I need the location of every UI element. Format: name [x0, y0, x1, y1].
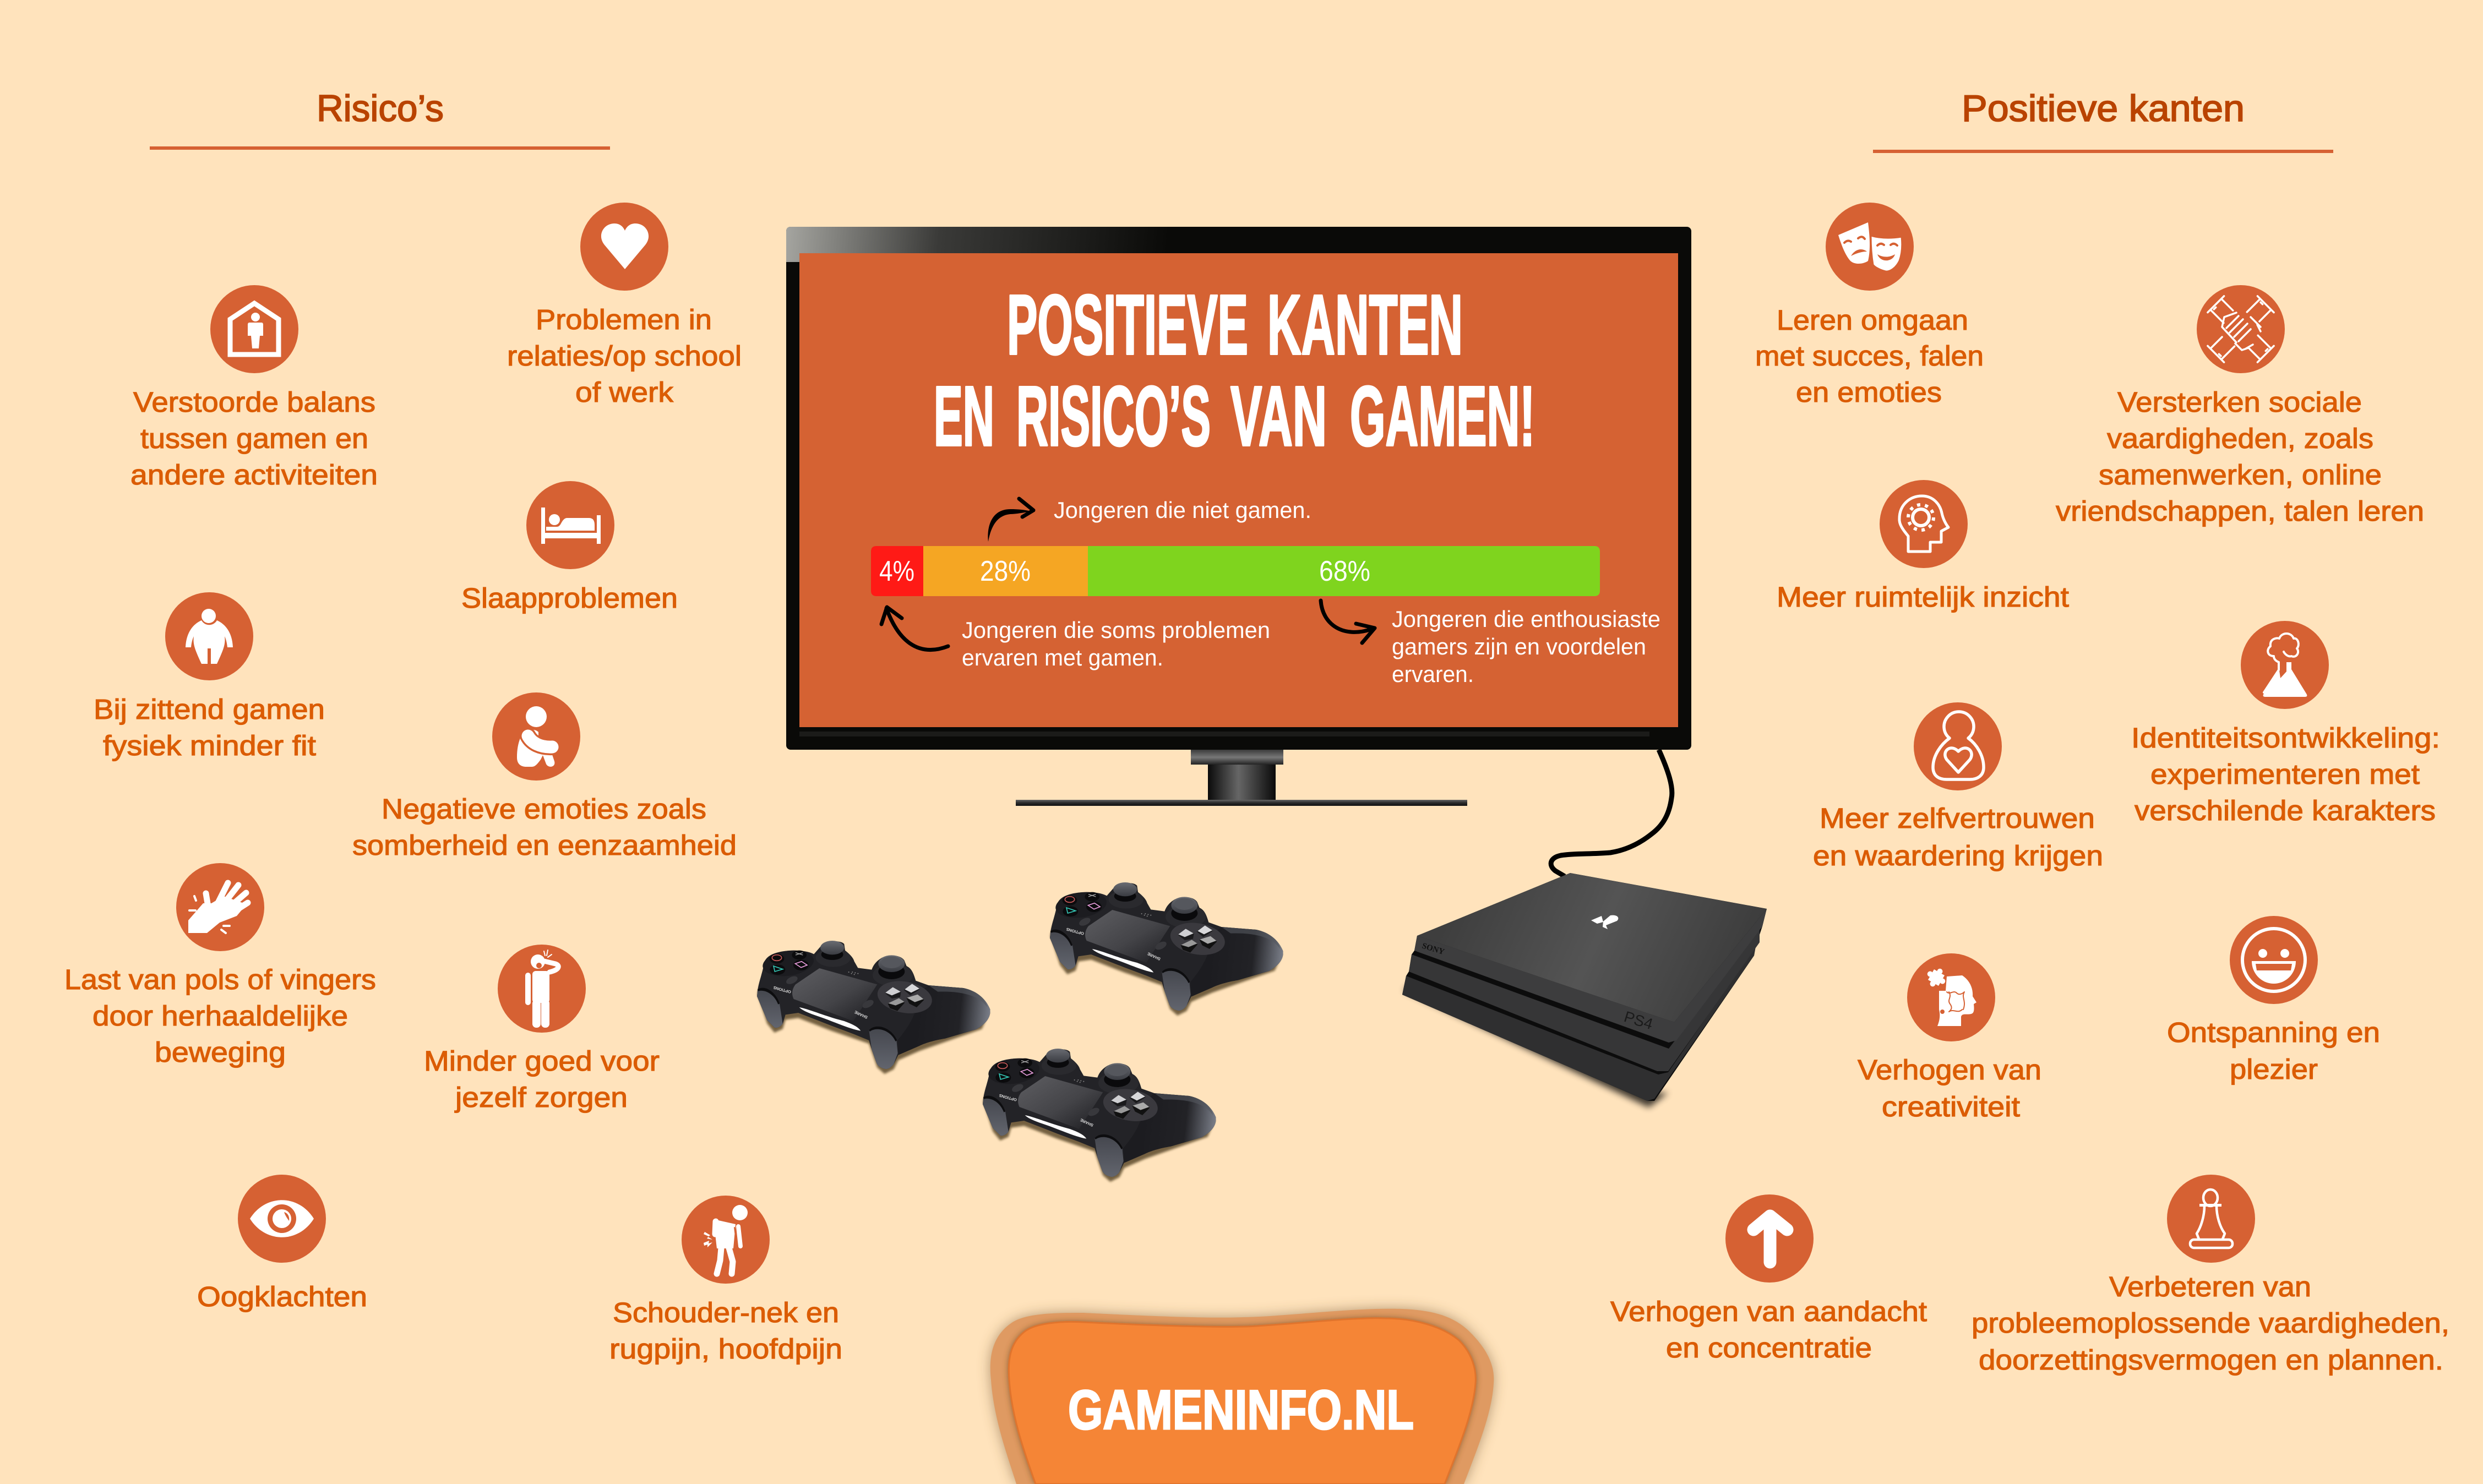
- text: schouder-nek: rugpijn, hoofdpijn: [609, 1333, 842, 1365]
- title: RISICO’S: [1016, 369, 1211, 463]
- badge inner shadow: [1009, 1318, 1475, 1484]
- sony label: SONY: [1421, 942, 1446, 957]
- text: zelfvertrouwen: [1813, 803, 2103, 871]
- icon: smiling face: [2230, 916, 2318, 1004]
- panel: positieve kanten heading: [1873, 88, 2333, 153]
- heading underline: [1873, 150, 2333, 153]
- heading: positieve kanten: Positieve kanten: [1962, 88, 2245, 129]
- risk: negatieve emoties: [352, 692, 737, 861]
- cable: [1551, 750, 1672, 876]
- title: EN: [934, 369, 994, 463]
- text: verbeteren: probleemoplossende vaardigheden,: [1972, 1307, 2449, 1339]
- icon: person holding head: [498, 945, 586, 1033]
- tv bezel: [786, 227, 1691, 750]
- console shadow: [1404, 985, 1668, 1107]
- text: verstoorde balans: [130, 386, 378, 490]
- icon: up arrow: [1725, 1194, 1814, 1283]
- badge shadow: [990, 1309, 1494, 1484]
- top slab side: [1414, 909, 1767, 1043]
- text: enthousiaste gamers: [1392, 606, 1660, 687]
- text: problemen in relaties: of werk: [575, 377, 674, 408]
- bar segment: 68%: [1085, 546, 1600, 596]
- icon: sitting person: [492, 692, 580, 781]
- text: ontspanning: Ontspanning en: [2167, 1017, 2380, 1048]
- text: enthousiaste gamers: gamers zijn en voordelen: [1392, 634, 1646, 659]
- icon: person with back pain: [682, 1196, 770, 1284]
- icon: heart: [580, 203, 668, 291]
- text: enthousiaste gamers: ervaren.: [1392, 661, 1474, 687]
- text: zelfvertrouwen: en waardering krijgen: [1813, 840, 2103, 871]
- text: ruimtelijk inzicht: Meer ruimtelijk inzicht: [1777, 581, 2069, 613]
- tv set: [786, 227, 1691, 806]
- text: last van pols: beweging: [155, 1036, 286, 1068]
- text: leren omgaan: met succes, falen: [1755, 340, 1984, 372]
- text: zittend gamen: fysiek minder fit: [103, 730, 316, 761]
- title: [934, 277, 1535, 463]
- risk: slaap: [461, 481, 678, 614]
- controller 2: SHARE: [1146, 951, 1161, 962]
- text: aandacht: [1610, 1296, 1927, 1363]
- text: identiteitsontwikkeling: [2131, 722, 2440, 826]
- logo badge: [990, 1309, 1494, 1484]
- text: verhogen creativiteit: creativiteit: [1882, 1091, 2020, 1122]
- text: minder goed voor: Minder goed voor: [424, 1045, 660, 1077]
- icon: overweight person: [165, 592, 253, 680]
- controller 1: OPTIONS: [773, 985, 792, 995]
- text: identiteitsontwikkeling: experimenteren met: [2150, 759, 2420, 790]
- icon: hurting hand: [176, 863, 264, 951]
- risk: oogklachten: [197, 1175, 367, 1312]
- text: verstoorde balans: Verstoorde balans: [133, 386, 375, 418]
- title: VAN: [1230, 369, 1327, 463]
- text: verstoorde balans: tussen gamen en: [140, 423, 368, 454]
- text: aandacht: en concentratie: [1666, 1332, 1872, 1363]
- risk: balans: [130, 285, 378, 490]
- top surface: [1417, 873, 1767, 1022]
- text: slaapproblemen: Slaapproblemen: [461, 582, 678, 614]
- value labels: 28%: [980, 555, 1031, 587]
- value labels: [879, 555, 1370, 587]
- text: oogklachten: Oogklachten: [197, 1281, 367, 1312]
- title: GAMEN!: [1350, 369, 1535, 463]
- text: last van pols: door herhaaldelijke: [92, 1000, 348, 1032]
- text: problemen in relaties: Problemen in: [536, 304, 712, 335]
- positive: sociale vaardigheden: [2056, 285, 2424, 527]
- text: verbeteren: Verbeteren van: [2109, 1271, 2311, 1302]
- middle slab: [1409, 929, 1760, 1071]
- text: versterken sociale: [2056, 386, 2424, 527]
- text: last van pols: [64, 964, 376, 1068]
- text: versterken sociale: vaardigheden, zoals: [2107, 423, 2373, 454]
- bar segment: 28%: [919, 546, 1088, 596]
- text: identiteitsontwikkeling: Identiteitsontwikkeling:: [2131, 722, 2440, 754]
- text: zittend gamen: Bij zittend gamen: [94, 694, 325, 725]
- icon: joined hands: [2197, 285, 2285, 373]
- text: last van pols: Last van pols of vingers: [64, 964, 376, 995]
- controller 2: [1050, 882, 1283, 1016]
- console body: [1402, 873, 1767, 1101]
- badge text: GAMENINFO.NL: [1068, 1379, 1414, 1441]
- icon: puzzle head: [1907, 953, 1995, 1041]
- text: minder goed voor: [424, 1045, 660, 1113]
- title: POSITIEVE: [1007, 277, 1248, 372]
- icon: erupting flask: [2241, 621, 2329, 709]
- risk: fysiek: [94, 592, 325, 761]
- positive: creativiteit: [1858, 953, 2041, 1122]
- risk: relaties: [507, 203, 742, 408]
- stacked bar chart: [871, 546, 1600, 596]
- controller 1: [757, 941, 990, 1074]
- positive: identiteit: [2131, 621, 2440, 826]
- bar segment: 4%: [871, 546, 923, 596]
- text: soms problemen: ervaren met gamen.: [962, 645, 1163, 670]
- text: versterken sociale: vriendschappen, talen leren: [2056, 495, 2424, 527]
- tv stand: [1016, 749, 1467, 806]
- text: verbeteren: [1972, 1271, 2449, 1376]
- risk: rugpijn: [609, 1196, 842, 1365]
- value labels: 68%: [1319, 555, 1370, 587]
- controller 3: [983, 1049, 1216, 1182]
- text: verhogen creativiteit: Verhogen van: [1858, 1054, 2041, 1085]
- text: verstoorde balans: andere activiteiten: [130, 459, 378, 490]
- positive: emoties: [1755, 203, 1984, 408]
- controller 2: OPTIONS: [1066, 926, 1085, 936]
- game console: [1402, 873, 1767, 1107]
- risk: pols: [64, 863, 376, 1068]
- title: KANTEN: [1267, 277, 1463, 372]
- text: niet gamen: Jongeren die niet gamen.: [1054, 497, 1311, 523]
- text: ontspanning: [2167, 1017, 2380, 1085]
- text: verhogen creativiteit: [1858, 1054, 2041, 1122]
- text: negatieve emoties: Negatieve emoties zoals: [382, 793, 706, 825]
- text: identiteitsontwikkeling: verschilende karakters: [2134, 795, 2436, 826]
- heading underline: [150, 146, 610, 150]
- text: schouder-nek: Schouder-nek en: [613, 1297, 839, 1328]
- risk: zelfzorg: [424, 945, 660, 1113]
- text: soms problemen: [962, 617, 1270, 670]
- text: leren omgaan: en emoties: [1796, 377, 1942, 408]
- text: problemen in relaties: relaties/op school: [507, 340, 742, 372]
- text: enthousiaste gamers: Jongeren die enthousiaste: [1392, 606, 1660, 632]
- panel: risico's heading: [150, 88, 610, 150]
- positive: ruimtelijk inzicht: [1777, 480, 2069, 613]
- text: versterken sociale: samenwerken, online: [2099, 459, 2382, 490]
- icon: theatre masks: [1826, 203, 1914, 291]
- badge outer: [990, 1309, 1494, 1484]
- controller 3: OPTIONS: [999, 1093, 1017, 1103]
- arrow: soms problemen: [881, 607, 948, 650]
- heading: risico's: Risico’s: [317, 88, 444, 129]
- playstation logo: [1591, 915, 1618, 929]
- text: zittend gamen: [94, 694, 325, 761]
- badge face: [1009, 1318, 1475, 1484]
- icon: eye: [238, 1175, 326, 1263]
- arrow: enthousiaste gamers: [1321, 601, 1375, 643]
- text: schouder-nek: [609, 1297, 842, 1365]
- ps4 label: PS4: [1622, 1008, 1655, 1033]
- text: soms problemen: Jongeren die soms problemen: [962, 617, 1270, 643]
- text: ontspanning: plezier: [2230, 1054, 2318, 1085]
- positive: ontspanning: [2167, 916, 2380, 1085]
- positive: probleemoplossend: [1972, 1175, 2449, 1376]
- value labels: 4%: [879, 555, 914, 587]
- icon: chess pawn: [2167, 1175, 2255, 1263]
- text: versterken sociale: Versterken sociale: [2117, 386, 2362, 418]
- tv sheen: [786, 227, 1168, 262]
- controller 1: SHARE: [853, 1010, 868, 1020]
- icon: bed: [526, 481, 614, 569]
- tv screen: [799, 253, 1678, 727]
- icon: head with gear: [1880, 480, 1968, 568]
- text: negatieve emoties: somberheid en eenzaamheid: [352, 830, 737, 861]
- text: minder goed voor: jezelf zorgen: [454, 1082, 628, 1113]
- text: aandacht: Verhogen van aandacht: [1610, 1296, 1927, 1327]
- text: leren omgaan: Leren omgaan: [1777, 304, 1968, 336]
- text: leren omgaan: [1755, 304, 1984, 408]
- bezel line: [799, 732, 1649, 736]
- icon: person in house: [210, 285, 298, 373]
- bottom slab: [1402, 946, 1756, 1101]
- text: verbeteren: doorzettingsvermogen en plannen.: [1979, 1344, 2443, 1376]
- positive: zelfvertrouwen: [1813, 702, 2103, 871]
- arrow: niet gamen: [988, 499, 1033, 542]
- positive: aandacht: [1610, 1194, 1927, 1363]
- text: negatieve emoties: [352, 793, 737, 861]
- controller 3: SHARE: [1079, 1117, 1094, 1128]
- text: problemen in relaties: [507, 304, 742, 408]
- icon: person with heart: [1914, 702, 2002, 790]
- text: zelfvertrouwen: Meer zelfvertrouwen: [1820, 803, 2095, 834]
